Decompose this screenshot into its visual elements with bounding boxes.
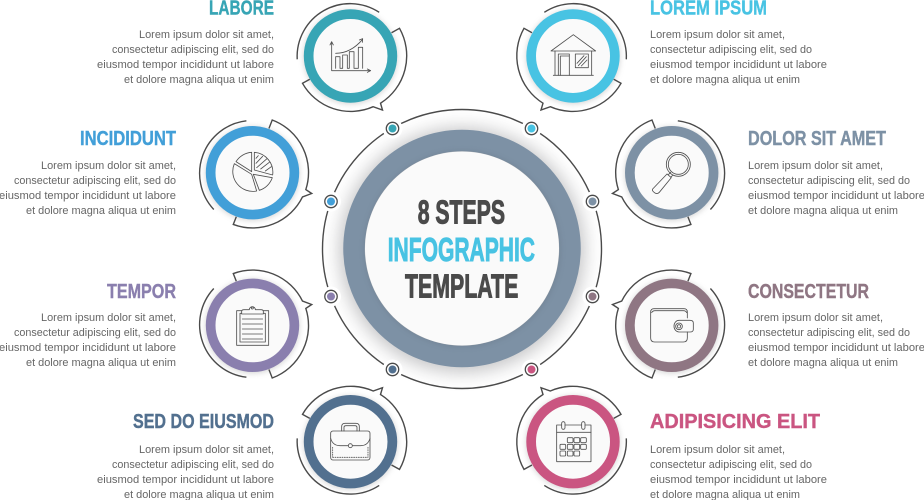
- labore text: Lorem ipsum dolor sit amet,: [139, 29, 274, 41]
- lorem ipsum text: consectetur adipiscing elit, sed do: [650, 44, 812, 56]
- tempor text: consectetur adipiscing elit, sed do: [14, 327, 176, 339]
- central title: TEMPLATE: [405, 269, 518, 306]
- icon: clipboard: [237, 307, 269, 345]
- dolor sit amet text: Lorem ipsum dolor sit amet,: [748, 160, 883, 172]
- consectetur heading: CONSECTETUR: [748, 281, 869, 303]
- dolor sit amet text: eiusmod tempor incididunt ut labore: [748, 190, 924, 202]
- icon: magnifier: [652, 152, 690, 194]
- tempor heading: TEMPOR: [107, 281, 176, 303]
- sed do eiusmod text: Lorem ipsum dolor sit amet,: [139, 444, 274, 456]
- central ring shadow: [340, 128, 584, 372]
- dolor sit amet text: et dolore magna aliqua ut enim: [748, 205, 898, 217]
- labore text: [97, 29, 274, 86]
- adipisicing elit text: Lorem ipsum dolor sit amet,: [650, 444, 785, 456]
- dolor sit amet text: consectetur adipiscing elit, sed do: [748, 175, 910, 187]
- incididunt text: eiusmod tempor incididunt ut labore: [0, 190, 176, 202]
- adipisicing elit text: [650, 444, 827, 500]
- central ring: [354, 140, 570, 356]
- central ring inner shadow: [364, 151, 560, 347]
- dolor sit amet ring: [593, 96, 746, 249]
- incididunt text: [0, 160, 176, 217]
- lorem ipsum text: [650, 29, 827, 86]
- consectetur text: [748, 312, 924, 369]
- dolor sit amet text: [748, 160, 924, 217]
- icon: wallet: [651, 309, 693, 342]
- central disc: [365, 152, 559, 346]
- incididunt text: et dolore magna aliqua ut enim: [26, 205, 176, 217]
- adipisicing elit text: consectetur adipiscing elit, sed do: [650, 459, 812, 471]
- sed do eiusmod text: eiusmod tempor incididunt ut labore: [97, 474, 274, 486]
- consectetur text: et dolore magna aliqua ut enim: [748, 357, 898, 369]
- step: lorem ipsum: [517, 0, 827, 111]
- step: incididunt: [0, 96, 331, 249]
- tempor ring: [178, 249, 331, 402]
- tempor text: Lorem ipsum dolor sit amet,: [41, 312, 176, 324]
- tempor text: eiusmod tempor incididunt ut labore: [0, 342, 176, 354]
- step: labore: [97, 0, 407, 111]
- lorem ipsum ring: [517, 4, 626, 111]
- step: dolor sit amet: [593, 96, 924, 249]
- step: adipisicing elit: [517, 386, 827, 500]
- incididunt text: consectetur adipiscing elit, sed do: [14, 175, 176, 187]
- sed do eiusmod ring: [297, 386, 407, 494]
- incididunt ring: [178, 96, 331, 249]
- lorem ipsum text: et dolore magna aliqua ut enim: [650, 74, 800, 86]
- incididunt heading: INCIDIDUNT: [80, 128, 176, 150]
- adipisicing elit ring: [517, 386, 626, 494]
- lorem ipsum text: eiusmod tempor incididunt ut labore: [650, 59, 827, 71]
- consectetur text: Lorem ipsum dolor sit amet,: [748, 312, 883, 324]
- connector dots: [321, 118, 602, 380]
- dolor sit amet heading: DOLOR SIT AMET: [748, 128, 886, 150]
- sed do eiusmod text: [97, 444, 274, 500]
- labore text: eiusmod tempor incididunt ut labore: [97, 59, 274, 71]
- central title: 8 STEPS: [418, 194, 505, 232]
- labore ring: [297, 4, 407, 111]
- central circle: [322, 110, 602, 388]
- icon: growth chart: [330, 39, 371, 72]
- icon: calendar: [557, 422, 591, 462]
- consectetur text: consectetur adipiscing elit, sed do: [748, 327, 910, 339]
- icon: briefcase: [331, 423, 370, 460]
- adipisicing elit text: eiusmod tempor incididunt ut labore: [650, 474, 827, 486]
- central title: [388, 194, 535, 306]
- adipisicing elit heading: ADIPISICING ELIT: [650, 411, 820, 433]
- incididunt text: Lorem ipsum dolor sit amet,: [41, 160, 176, 172]
- central title: INFOGRAPHIC: [388, 232, 535, 269]
- consectetur text: eiusmod tempor incididunt ut labore: [748, 342, 924, 354]
- step: sed do eiusmod: [97, 386, 407, 500]
- step: tempor: [0, 249, 331, 402]
- outer ring line: [322, 110, 602, 388]
- labore text: et dolore magna aliqua ut enim: [124, 74, 274, 86]
- labore text: consectetur adipiscing elit, sed do: [112, 44, 274, 56]
- icon: pie chart: [233, 152, 273, 191]
- tempor text: et dolore magna aliqua ut enim: [26, 357, 176, 369]
- tempor text: [0, 312, 176, 369]
- consectetur ring: [593, 249, 746, 402]
- lorem ipsum text: Lorem ipsum dolor sit amet,: [650, 29, 785, 41]
- sed do eiusmod text: consectetur adipiscing elit, sed do: [112, 459, 274, 471]
- sed do eiusmod heading: SED DO EIUSMOD: [133, 411, 274, 433]
- step: consectetur: [593, 249, 924, 402]
- icon: house: [551, 35, 596, 75]
